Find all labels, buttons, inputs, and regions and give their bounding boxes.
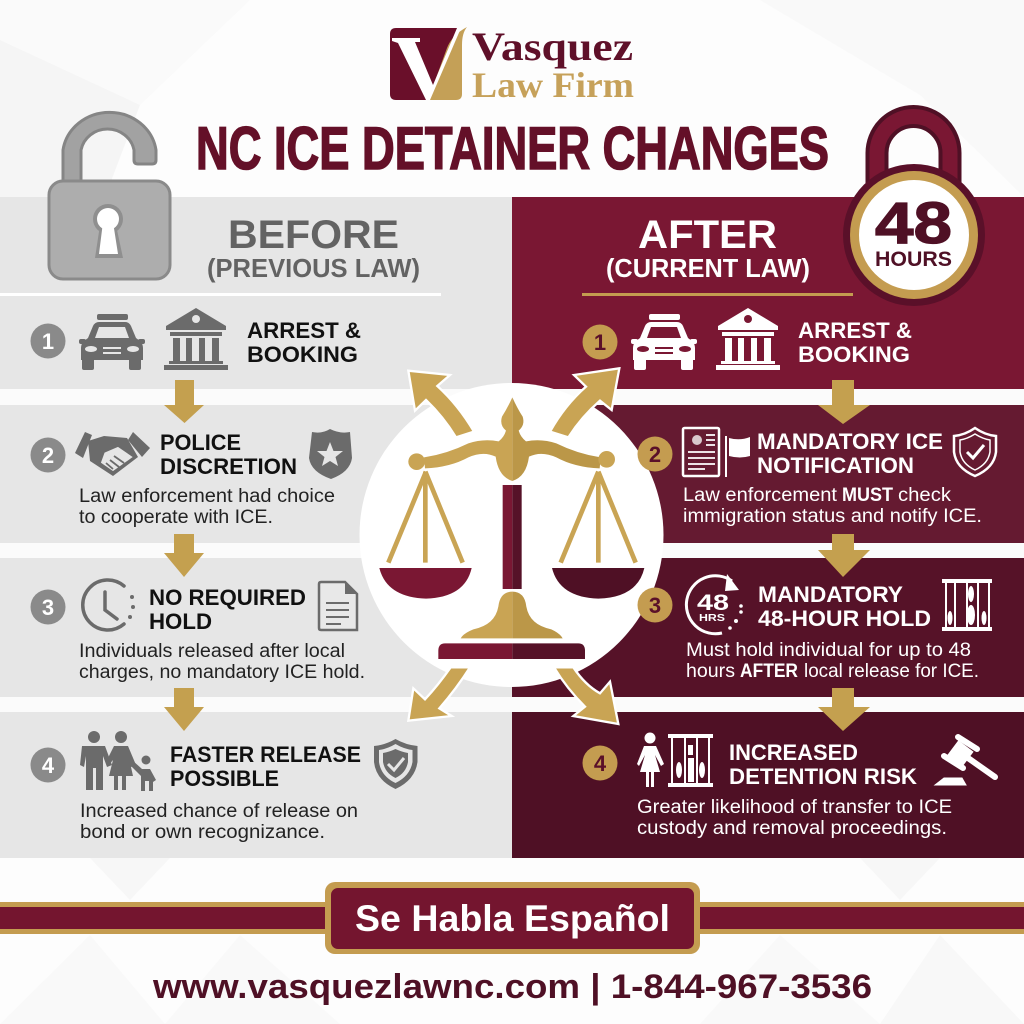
step 3 heading: MANDATORY: [758, 582, 903, 607]
arrow: up right: [550, 368, 619, 437]
step 2 heading: [160, 430, 297, 479]
icon: family: [80, 731, 156, 791]
icon: 48 hour timer: 48: [697, 590, 729, 615]
banner: se habla espanol: [0, 882, 1024, 954]
step 2 description: check: [898, 485, 952, 506]
step 3 description: local release for ICE.: [804, 661, 979, 682]
logo wordmark: Vasquez: [472, 24, 633, 69]
step 4 description: Increased chance of release on: [80, 801, 358, 822]
icon: closed padlock with 48 hours: 48: [875, 191, 952, 256]
banner: se habla espanol: Se Habla Español: [355, 898, 670, 939]
title: NC ICE DETAINER CHANGES: [196, 115, 829, 182]
step 4 heading: [729, 740, 917, 789]
heading: before: (PREVIOUS LAW): [207, 253, 420, 283]
icon: courthouse: [716, 308, 780, 370]
step 3 description: [686, 640, 979, 682]
step 3 description: hours: [686, 661, 735, 682]
scale: left half: [379, 397, 512, 659]
number badge 1: [30, 324, 66, 358]
step 4: increased detention risk: [582, 732, 995, 839]
icon: flag: [725, 436, 750, 477]
step 2 heading: DISCRETION: [160, 454, 297, 479]
arrow: step 1 to 2: [818, 380, 870, 424]
logo mark: [390, 27, 467, 100]
number badge 4: [582, 746, 618, 780]
center scales of justice: [360, 368, 664, 724]
step 3 heading: NO REQUIRED: [149, 585, 306, 610]
step 1: arrest and booking: [582, 308, 912, 370]
logo wordmark: [472, 24, 634, 105]
step 2 description: [79, 486, 335, 528]
step 4 heading: DETENTION RISK: [729, 764, 917, 789]
step 4 description: Greater likelihood of transfer to ICE: [637, 797, 952, 818]
number badge 4: 4: [42, 753, 55, 778]
step 4 heading: INCREASED: [729, 740, 858, 765]
icon: report document: [683, 428, 719, 476]
step 2 description: to cooperate with ICE.: [79, 507, 273, 528]
heading: before: BEFORE: [228, 213, 399, 257]
after step 2 number badge: 2: [649, 442, 661, 467]
step 2 heading: POLICE: [160, 430, 241, 455]
step 4 description: custody and removal proceedings.: [637, 818, 947, 839]
after step 3 number badge: 3: [649, 593, 661, 618]
step 3 heading: HOLD: [149, 609, 212, 634]
step 2 heading: NOTIFICATION: [757, 453, 914, 478]
icon: person: [637, 732, 664, 787]
step 2: mandatory ice notification: [683, 428, 996, 527]
arrow: step 3 to 4: [164, 688, 204, 731]
icon: gavel: [935, 737, 995, 785]
icon: 48 hour timer: HRS: [699, 613, 725, 624]
number badge 4: [30, 748, 66, 782]
step 2 description: immigration status and notify ICE.: [683, 506, 982, 527]
step 2: police discretion: [30, 429, 352, 528]
step 1: arrest and booking: [30, 308, 361, 370]
number badge 3: 3: [42, 595, 54, 620]
step 1 heading: [798, 318, 912, 367]
heading: after: [606, 213, 810, 283]
step 3 description: Must hold individual for up to 48: [686, 640, 971, 661]
scale: right half: [512, 397, 644, 659]
icon: jail cell: [668, 734, 713, 787]
step 3 heading: 48-HOUR HOLD: [758, 606, 931, 631]
step 1 heading: BOOKING: [798, 342, 910, 367]
step 2 description: Law enforcement: [683, 485, 838, 506]
icon: shield with check: [954, 428, 996, 476]
step 2 description: [683, 485, 982, 527]
step 1 heading: ARREST &: [247, 318, 361, 343]
step 3: no required hold: [30, 580, 365, 683]
after step 3 number badge: [638, 588, 672, 622]
arrow: down left: [408, 667, 470, 721]
icon: 48 hour timer: [686, 574, 743, 634]
step 4 heading: FASTER RELEASE: [170, 742, 361, 767]
panel: before (previous law): [0, 112, 512, 858]
arrow: step 2 to 3: [818, 534, 870, 577]
logo: [390, 24, 634, 105]
icon: jail cell: [942, 579, 992, 631]
step 1 heading: BOOKING: [247, 342, 358, 367]
number badge 3: [30, 590, 66, 624]
icon: closed padlock with 48 hours: [843, 116, 985, 306]
icon: document: [319, 582, 357, 630]
heading: before: [207, 213, 420, 283]
number badge 2: 2: [42, 443, 54, 468]
logo wordmark: Law Firm: [472, 65, 634, 105]
arrow: step 3 to 4: [818, 688, 870, 731]
number badge 1: 1: [42, 329, 54, 354]
arrow: up left: [408, 371, 474, 437]
icon: closed padlock with 48 hours: HOURS: [875, 248, 952, 271]
step 4 description: [637, 797, 952, 839]
panel: after (current law): [512, 116, 1024, 858]
step 4 description: bond or own recognizance.: [80, 822, 325, 843]
step 4 heading: [170, 742, 361, 791]
icon: police car: [631, 314, 697, 370]
icon: police badge: [309, 429, 352, 479]
heading: after: (CURRENT LAW): [606, 253, 810, 283]
step 2 description: MUST: [842, 485, 893, 506]
contact line: www.vasquezlawnc.com | 1-844-967-3536: [152, 968, 872, 1006]
step 3 heading: [149, 585, 306, 634]
arrow: down right: [554, 667, 618, 724]
step 1 heading: ARREST &: [798, 318, 912, 343]
after step 2 number badge: [638, 436, 672, 472]
step 4: faster release possible: [30, 731, 418, 843]
step 2 heading: MANDATORY ICE: [757, 429, 943, 454]
arrow: step 1 to 2: [164, 380, 204, 423]
step 4 heading: POSSIBLE: [170, 766, 279, 791]
step 3 description: Individuals released after local: [79, 641, 345, 662]
icon: handshake: [75, 432, 150, 476]
icon: clock: [83, 580, 135, 630]
icon: shield with check: [374, 739, 418, 789]
step 3: mandatory 48-hour hold: [686, 574, 992, 682]
heading: after: AFTER: [638, 213, 777, 257]
step 2 heading: [757, 429, 943, 478]
icon: police car: [79, 314, 145, 370]
step 3 heading: [758, 582, 931, 631]
number badge 2: [30, 438, 66, 472]
number badge 4: 4: [594, 751, 607, 776]
step 3 description: AFTER: [740, 661, 798, 682]
number badge 1: [582, 324, 618, 360]
step 4 description: [80, 801, 358, 843]
step 3 description: [79, 641, 365, 683]
step 2 description: Law enforcement had choice: [79, 486, 335, 507]
step 1 heading: [247, 318, 361, 367]
icon: courthouse: [164, 308, 228, 370]
icon: badge star: [317, 442, 343, 466]
step 3 description: charges, no mandatory ICE hold.: [79, 662, 365, 683]
icon: open padlock: [49, 112, 170, 279]
number badge 1: 1: [594, 330, 606, 355]
arrow: step 2 to 3: [164, 534, 204, 577]
